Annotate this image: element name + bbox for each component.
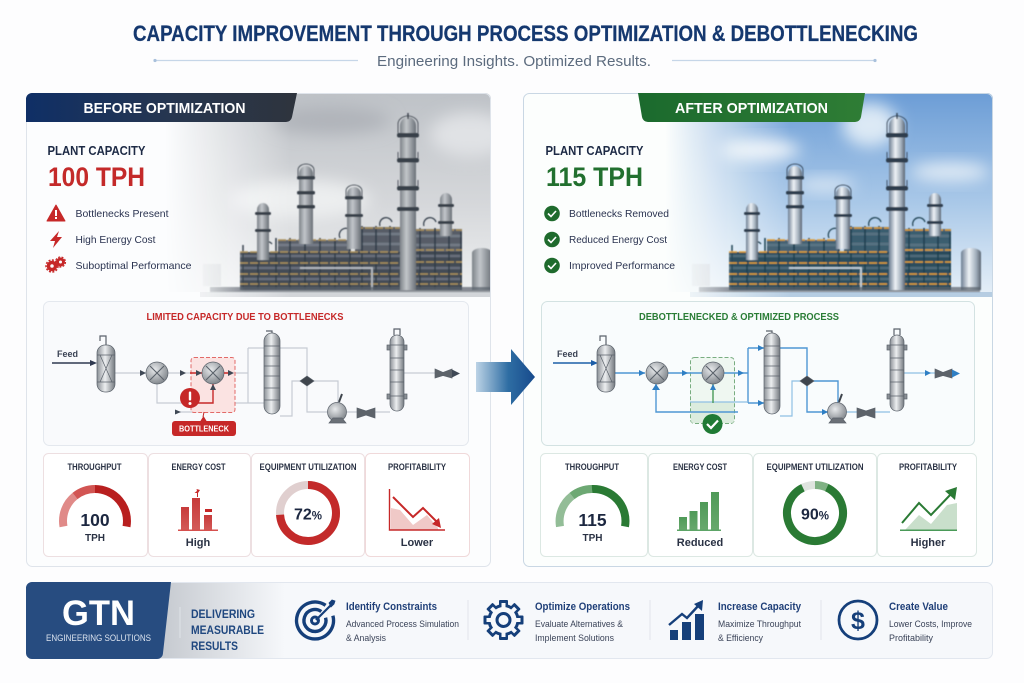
step: identify constraints: Identify Constraints [346,601,437,613]
kpi: throughput after: 115 [578,510,607,530]
feed arrow: Feed [557,349,578,359]
step: identify constraints [346,601,459,644]
plant capacity: after: 115 TPH [546,162,643,192]
step: increase capacity [718,601,801,644]
step: increase capacity: Maximize Throughput [718,619,801,630]
status list: after: Reduced Energy Cost [569,234,667,246]
icon: target [297,600,335,639]
kpi: profitability after: Higher [911,537,946,549]
tagline [191,609,264,653]
pipes [115,348,435,416]
kpi: throughput after: THROUGHPUT [565,462,619,472]
kpi: equipment utilization before: EQUIPMENT UTILIZATION [260,462,356,472]
process diagram: after: DEBOTTLENECKED & OPTIMIZED PROCESS [639,311,839,323]
icon: gears [46,257,66,272]
plant capacity: before [48,144,146,192]
kpi: profitability before: PROFITABILITY [388,462,446,472]
kpi: energy cost before: High [186,537,210,549]
feed arrow [52,349,97,366]
step: create value: Lower Costs, Improve [889,619,972,630]
panel: before optimization [26,93,510,567]
step: create value: Create Value [889,601,948,613]
step: optimize operations [535,601,630,644]
status list: after: Bottlenecks Removed [569,208,669,220]
arrow: before to after [476,349,535,405]
step: optimize operations: Optimize Operations [535,601,630,613]
optimized zone [690,358,734,424]
process diagram: after [542,302,974,446]
kpi: energy cost before: ENERGY COST [172,462,226,472]
status list: before [46,205,192,272]
step: identify constraints: Advanced Process Simulation [346,619,459,630]
tagline: RESULTS [191,641,238,653]
kpi: equipment utilization after: 90% [801,506,829,524]
logo block [26,582,171,659]
header tab: after: AFTER OPTIMIZATION [675,100,828,117]
logo block: GTN [62,594,135,633]
kpi: equipment utilization before: 72% [294,506,322,524]
step: create value [889,601,972,644]
icon: check 3 [544,258,560,273]
process diagram: before [44,302,468,446]
plant capacity: before: 100 TPH [48,162,145,192]
feed arrow [553,349,598,366]
icon: check 2 [544,232,560,247]
status list: before: Bottlenecks Present [76,208,169,220]
bottleneck highlight [191,358,235,412]
tagline: DELIVERING [191,609,255,621]
bottleneck badge [172,412,236,436]
kpi: profitability after: PROFITABILITY [899,462,957,472]
step: create value: Profitability [889,633,933,644]
footer banner [26,582,992,659]
kpi: equipment utilization after: EQUIPMENT UTILIZATION [766,462,864,472]
step: optimize operations: Evaluate Alternatives & [535,619,624,630]
subtitle [153,54,877,70]
check badge [702,414,722,434]
plant photo: before [183,93,491,297]
kpi: profitability before [366,454,470,556]
step: increase capacity: Increase Capacity [718,601,801,613]
bottleneck badge: BOTTLENECK [179,424,229,434]
plant capacity: after: PLANT CAPACITY [546,144,644,158]
kpi: throughput after: TPH [582,533,602,544]
kpi: profitability before: Lower [401,537,434,549]
bottleneck alert [180,388,200,408]
plant photo: after [673,93,993,297]
icon: dollar [839,601,877,639]
icon: lightning [50,231,62,248]
equipment [97,329,452,423]
header tab: before [26,93,297,122]
status list: after: Improved Performance [569,260,675,272]
kpi: equipment utilization before [252,454,364,556]
header tab: after [638,93,865,122]
kpi: throughput before: TPH [85,533,105,544]
kpi: energy cost before [148,454,250,556]
kpi: energy cost after: Reduced [677,537,723,549]
process diagram: before: LIMITED CAPACITY DUE TO BOTTLENECKS [146,311,344,323]
kpi: throughput before: 100 [80,510,110,530]
kpi: throughput before [44,454,148,556]
tagline: MEASURABLE [191,625,264,637]
kpi: energy cost after: ENERGY COST [673,462,727,472]
logo block: ENGINEERING SOLUTIONS [46,633,151,643]
plant capacity: before: PLANT CAPACITY [48,144,146,158]
icon: dollar: $ [851,607,865,635]
step: optimize operations: Implement Solutions [535,633,614,644]
status list: after [544,206,675,273]
kpi: equipment utilization after [754,454,876,556]
kpi: energy cost after [648,454,752,556]
plant capacity: after [546,144,644,192]
icon: check 1 [544,206,560,221]
equipment [597,329,952,423]
header tab: before: BEFORE OPTIMIZATION [84,100,246,117]
feed arrow: Feed [57,349,78,359]
step: increase capacity: & Efficiency [718,633,763,644]
icon: growth chart [669,600,704,640]
kpi: profitability after [878,454,976,556]
subtitle: Engineering Insights. Optimized Results. [377,54,651,70]
status list: before: Suboptimal Performance [76,260,192,272]
kpi: throughput after [540,454,648,556]
kpi: throughput before: THROUGHPUT [68,462,122,472]
status list: before: High Energy Cost [76,234,156,246]
icon: warning triangle [47,205,65,221]
pipes [615,348,838,412]
icon: gear [484,600,524,640]
step: identify constraints: & Analysis [346,633,386,644]
panel: after optimization [523,93,993,567]
